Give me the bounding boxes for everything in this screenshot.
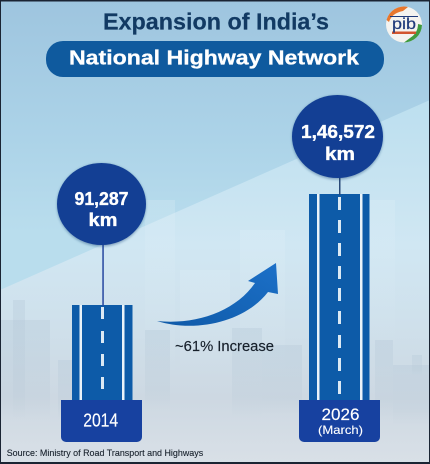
callout: 1,46,572 km: 1,46,572 — [301, 122, 375, 142]
callout: 91,287 km: km — [88, 210, 118, 230]
label: 2026 (March) — [299, 400, 380, 442]
callout: 91,287 km: 91,287 — [74, 189, 128, 209]
label: 2026 (March): (March) — [318, 423, 363, 437]
connector line 2014 — [102, 243, 104, 306]
heading pill — [46, 41, 384, 77]
road: 2014 — [72, 305, 132, 401]
title: Expansion of India’s — [103, 8, 329, 34]
callout: 1,46,572 km: km — [325, 144, 355, 164]
connector line 2026 — [339, 176, 340, 195]
road: 2026 — [309, 194, 370, 401]
source: Source: Ministry of Road Transport and Highways — [7, 448, 204, 458]
label: 2014: 2014 — [83, 410, 118, 430]
icon: PIB logo — [386, 6, 422, 43]
icon: PIB logo: pib — [392, 16, 416, 33]
label: 2026 (March): 2026 — [322, 405, 360, 424]
callout: 91,287 km — [57, 163, 146, 246]
increase label: ~61% Increase — [175, 339, 274, 355]
callout: 1,46,572 km — [292, 95, 383, 180]
heading pill: National Highway Network — [69, 46, 360, 70]
label: 2014 — [61, 400, 142, 442]
arrow — [157, 263, 278, 326]
